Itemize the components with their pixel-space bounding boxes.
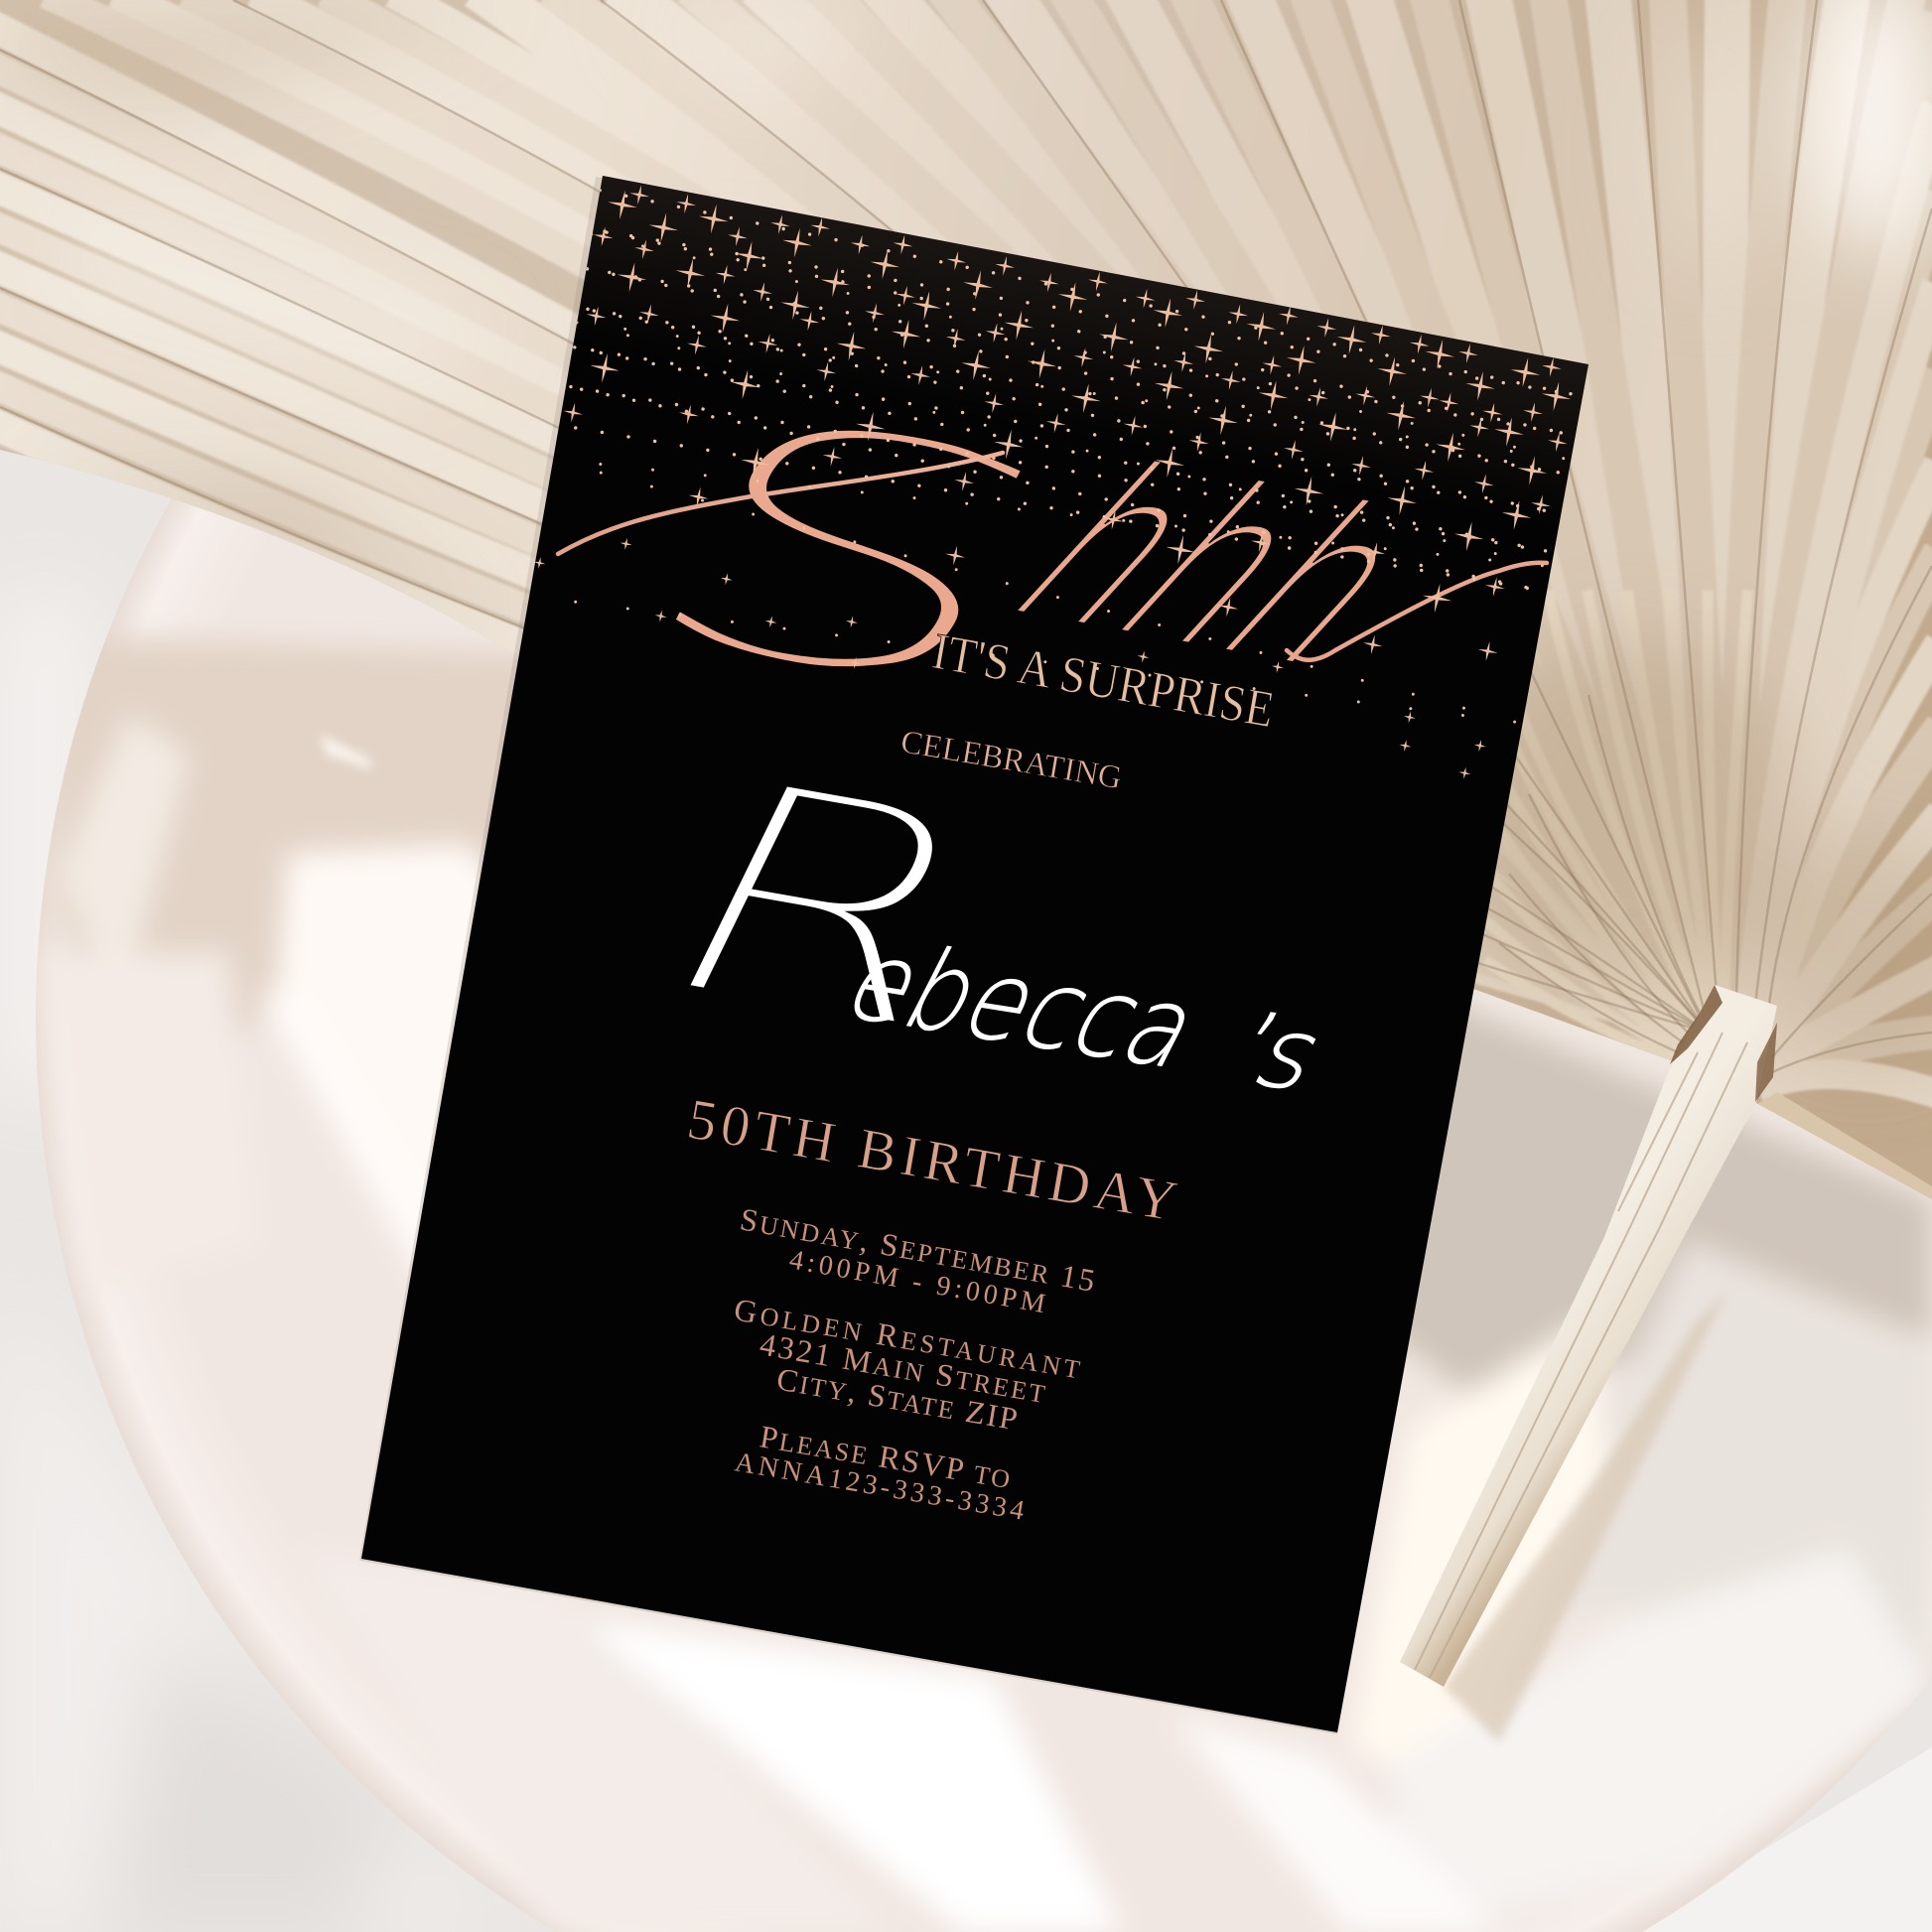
lettering: Shhh: S bbox=[569, 344, 1127, 764]
venue block: GOLDEN RESTAURANT bbox=[732, 1291, 1083, 1385]
glint on plate bbox=[320, 735, 373, 769]
black invitation card bbox=[359, 174, 1597, 1734]
heading: Shhh: hhh bbox=[954, 425, 1478, 713]
name: Rebecca's bbox=[603, 721, 1337, 1112]
label: celebrating: CELEBRATING bbox=[898, 724, 1125, 796]
name: Rebecca's: ’s bbox=[1211, 993, 1337, 1112]
large and medium stars bbox=[605, 188, 639, 222]
stem knots bbox=[1670, 985, 1723, 1064]
RSVP block: ANNA123-333-3334 bbox=[733, 1447, 1027, 1527]
heading: Shhh bbox=[558, 344, 1547, 764]
venue block bbox=[732, 1291, 1083, 1437]
venue block: 4321 MAIN STREET bbox=[758, 1325, 1048, 1410]
frond ribs light bands bbox=[0, 0, 1708, 1033]
date and time block: 4:00PM - 9:00PM bbox=[787, 1244, 1047, 1319]
frond shading overlays bbox=[0, 0, 1932, 1072]
sparkle stars across top of card bbox=[511, 174, 1597, 794]
stem grain lines bbox=[1415, 1033, 1747, 1678]
narrow pleats converging on the stem bbox=[1489, 596, 1747, 1062]
flourish entering the S bbox=[558, 453, 1003, 554]
frond lower fold bbox=[1757, 1092, 1932, 1199]
flourish leaving the last h bbox=[1287, 563, 1547, 660]
fine glitter dots bbox=[556, 191, 1581, 610]
name: Rebecca's: R bbox=[603, 721, 1046, 1094]
date and time block: SUNDAY, SEPTEMBER 15 bbox=[738, 1200, 1098, 1299]
frond stem bbox=[1400, 985, 1777, 1687]
soft glow along top edge bbox=[584, 176, 1588, 471]
shadow of stem on plate bbox=[1444, 1291, 1727, 1742]
frond shadow lines bbox=[0, 0, 1932, 1072]
dried palm frond fan bbox=[0, 0, 1932, 1199]
subheading: it's a surprise: IT'S A SURPRISE bbox=[928, 623, 1279, 739]
occasion: 50th birthday: 50TH BIRTHDAY bbox=[683, 1086, 1182, 1234]
plate shadow and light patches bbox=[40, 635, 1932, 1932]
venue block: CITY, STATE ZIP bbox=[774, 1360, 1020, 1437]
RSVP block: PLEASE RSVP TO bbox=[758, 1418, 1013, 1495]
name: Rebecca's: ebecca bbox=[826, 918, 1221, 1093]
round white plate bbox=[36, 498, 1932, 1932]
